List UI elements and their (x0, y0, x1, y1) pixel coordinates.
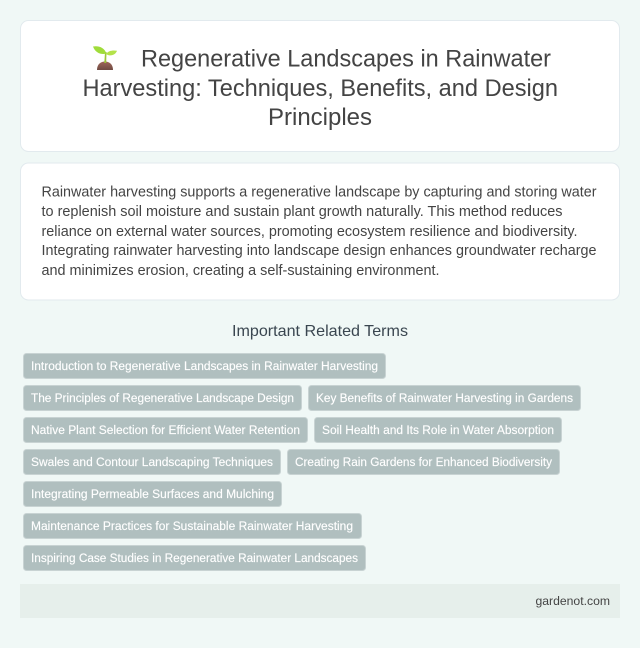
tag: key benefits (308, 386, 580, 410)
tag: maintenance: Maintenance Practices for Sustainable Rainwater Harvesting (31, 519, 353, 533)
tag: introduction: Introduction to Regenerative Landscapes in Rainwater Harvesting (31, 359, 378, 373)
tag: key benefits: Key Benefits of Rainwater Harvesting in Gardens (316, 391, 573, 405)
tag: swales: Swales and Contour Landscaping Techniques (31, 455, 273, 469)
title text (82, 46, 558, 131)
icon: sprout (93, 46, 117, 70)
tag: soil health: Soil Health and Its Role in Water Absorption (322, 423, 554, 437)
title text: Harvesting: Techniques, Benefits, and Design (82, 75, 558, 102)
title panel (20, 20, 620, 152)
tag: case studies (24, 546, 366, 570)
tag: maintenance (24, 514, 362, 538)
description text: Rainwater harvesting supports a regenerative landscape by capturing and storing water (42, 185, 597, 201)
footer (20, 584, 620, 618)
title text: Principles (268, 104, 372, 131)
footer source text: gardenot.com (536, 594, 610, 608)
related terms tags (24, 354, 580, 570)
description text: reliance on external water sources, promoting ecosystem resilience and biodiversity. (42, 224, 578, 240)
panel: description (20, 163, 620, 300)
tag: introduction (24, 354, 386, 378)
heading: related terms: Important Related Terms (232, 323, 408, 340)
tag: native plants (24, 418, 308, 442)
description text: Integrating rainwater harvesting into landscape design enhances groundwater recharge (42, 243, 596, 259)
tag: principles: The Principles of Regenerative Landscape Design (31, 391, 294, 405)
tag: case studies: Inspiring Case Studies in Regenerative Rainwater Landscapes (31, 551, 358, 565)
tag: permeable surfaces (24, 482, 282, 506)
description text: to replenish soil moisture and sustain plant growth naturally. This method reduces (42, 204, 562, 220)
tag: native plants: Native Plant Selection for Efficient Water Retention (31, 423, 300, 437)
description text: and minimizes erosion, creating a self-sustaining environment. (42, 263, 440, 279)
tag: swales (24, 450, 280, 474)
title text: Regenerative Landscapes in Rainwater (141, 46, 551, 73)
tag: permeable surfaces: Integrating Permeable Surfaces and Mulching (31, 487, 274, 501)
description text (42, 185, 597, 279)
tag: soil health (314, 418, 562, 442)
tag: principles (24, 386, 302, 410)
tag: rain gardens (288, 450, 560, 474)
tag: rain gardens: Creating Rain Gardens for Enhanced Biodiversity (295, 455, 553, 469)
